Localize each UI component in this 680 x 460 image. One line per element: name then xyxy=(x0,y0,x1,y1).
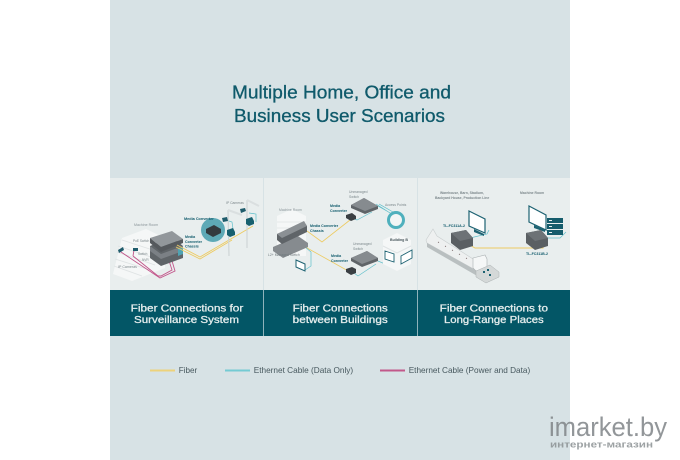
building B: Building B xyxy=(390,238,408,242)
caption: buildings: Fiber Connections xyxy=(293,304,388,314)
labels: chassis and cameras xyxy=(185,201,244,248)
small media converters xyxy=(346,213,356,275)
right converter: TL-FC311B-2 xyxy=(526,252,548,256)
location labels xyxy=(435,191,544,200)
unmanaged switch bottom: Unmanaged xyxy=(353,242,372,246)
labels xyxy=(268,204,349,263)
location labels: Machine Room xyxy=(520,191,544,195)
fiber cable xyxy=(468,244,544,248)
labels: Converter xyxy=(330,209,348,213)
building: machine room xyxy=(113,223,165,281)
media converter callout xyxy=(184,217,225,242)
media converter callout: Media Converter xyxy=(184,217,214,221)
labels: Media Converter xyxy=(310,224,339,228)
ethernet cables xyxy=(470,230,566,238)
building: machine room: IP Cameras xyxy=(118,265,137,269)
caption: surveillance: Surveillance System xyxy=(134,315,239,326)
production line xyxy=(426,229,499,283)
caption: buildings xyxy=(293,304,388,326)
fiber cable xyxy=(176,226,253,259)
labels: chassis and cameras: Chassis xyxy=(185,244,199,248)
caption: long-range xyxy=(440,304,549,326)
labels: L2+ Managed Switch xyxy=(268,253,300,257)
labels: Converter xyxy=(331,259,349,263)
building: machine room xyxy=(277,208,306,256)
labels: Chassis xyxy=(310,229,324,233)
building: machine room: PoE Switch xyxy=(133,239,150,243)
legend: ethernet data: Ethernet Cable (Data Only) xyxy=(254,365,353,375)
caption band xyxy=(110,290,570,336)
left monitor xyxy=(469,211,485,236)
building: machine room: Switch xyxy=(138,252,148,256)
legend: fiber xyxy=(150,365,197,375)
monitor xyxy=(296,260,305,271)
access point ring: Access Points xyxy=(385,203,407,207)
switch stack xyxy=(150,231,183,266)
unmanaged switch top xyxy=(349,190,378,214)
page background panel xyxy=(110,0,570,460)
caption: long-range: Long-Range Places xyxy=(444,315,544,326)
caption: long-range: Fiber Connections to xyxy=(440,304,549,314)
poles and cameras xyxy=(222,200,259,256)
legend xyxy=(150,365,530,375)
labels: chassis and cameras: Media xyxy=(185,235,196,239)
access point ring xyxy=(385,203,407,228)
labels: chassis and cameras: Converter xyxy=(185,240,203,244)
building: machine room: Machine Room xyxy=(134,223,158,227)
panel: surveillance scenario xyxy=(110,178,263,290)
caption: surveillance: Fiber Connections for xyxy=(131,304,244,314)
panel: long-range scenario xyxy=(418,178,570,290)
ethernet cables xyxy=(298,204,404,276)
legend: fiber: Fiber xyxy=(179,365,197,375)
labels: Media xyxy=(330,204,341,208)
unmanaged switch top: Switch xyxy=(349,195,359,199)
server rack xyxy=(547,218,563,235)
ethernet power and data cable xyxy=(120,244,175,278)
right converter xyxy=(526,230,548,256)
title: Multiple Home, Office and xyxy=(232,82,451,102)
watermark: интернет-магазин xyxy=(550,440,653,450)
unmanaged switch bottom: Switch xyxy=(353,247,363,251)
managed switches xyxy=(273,221,308,258)
building: machine room: Machine Room xyxy=(279,208,302,212)
icon: cameras in building xyxy=(118,247,138,253)
caption: buildings: between Buildings xyxy=(293,315,388,326)
panel: buildings scenario xyxy=(264,178,417,290)
left converter: TL-FC311A-2 xyxy=(443,224,465,228)
caption: surveillance xyxy=(131,304,244,326)
unmanaged switch top: Unmanaged xyxy=(349,190,368,194)
right monitor xyxy=(529,206,546,232)
building: machine room: NVR xyxy=(142,258,149,262)
legend: ethernet power: Ethernet Cable (Power and Data) xyxy=(409,365,530,375)
building B xyxy=(383,233,412,271)
fiber cables xyxy=(300,220,350,272)
labels: chassis and cameras: IP Cameras xyxy=(226,201,244,205)
ethernet data cables xyxy=(226,213,256,229)
unmanaged switch bottom xyxy=(351,242,378,267)
watermark: imarket.by xyxy=(549,412,667,442)
labels: Media xyxy=(331,254,342,258)
title: Business User Scenarios xyxy=(234,106,445,126)
title xyxy=(232,82,451,126)
location labels: Backyard House, Production Line xyxy=(435,196,489,200)
left converter xyxy=(443,224,473,250)
location labels: Warehouse, Barn, Stadium, xyxy=(440,191,484,195)
